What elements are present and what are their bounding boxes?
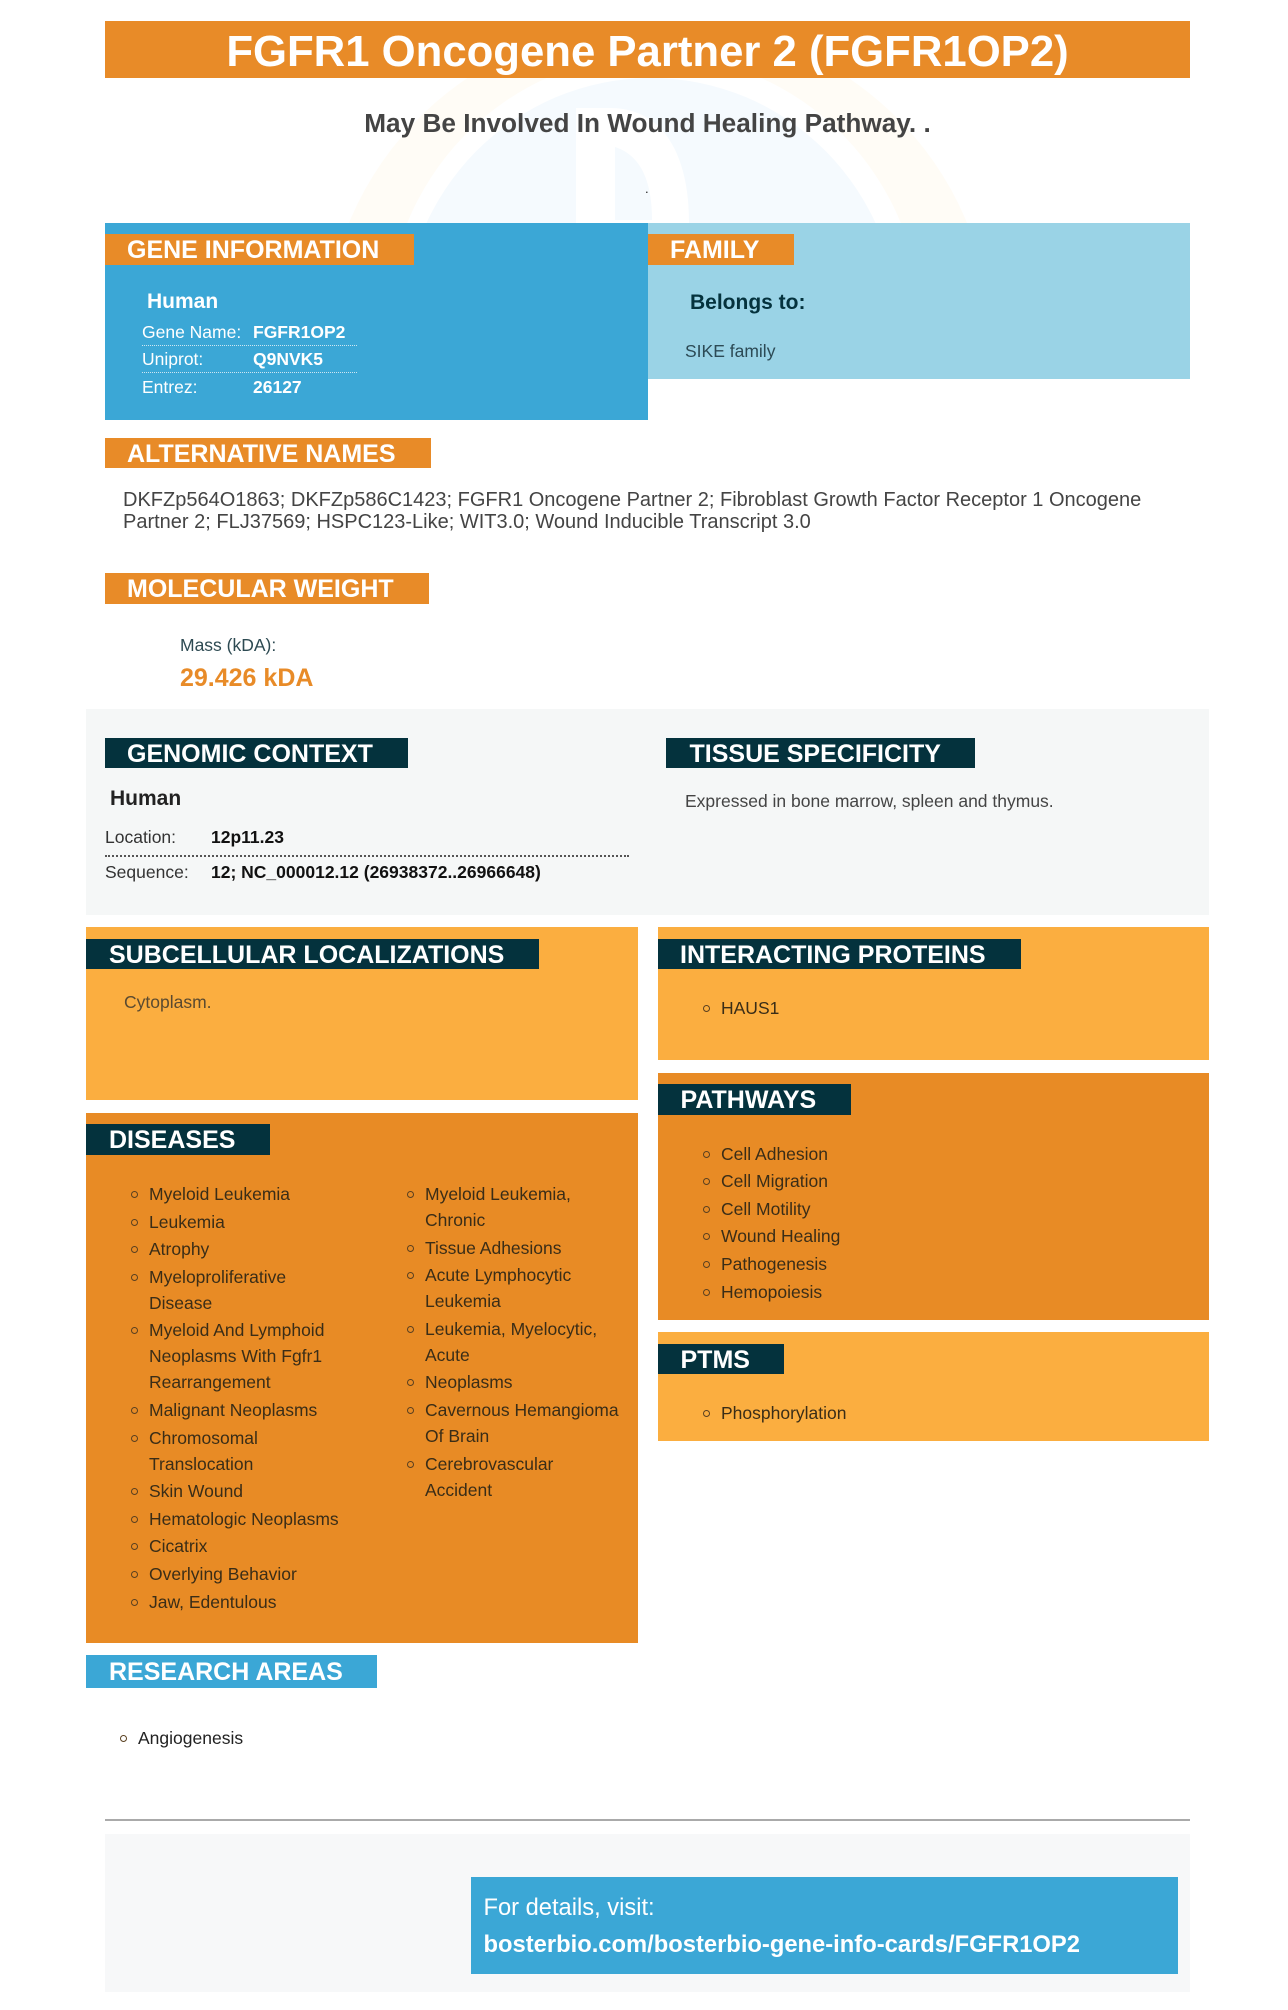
disease list column 2: Leukemia, Myelocytic, (425, 1319, 597, 1339)
entrez row: Entrez: (142, 377, 197, 397)
entrez row (142, 377, 302, 397)
alternative names text (123, 489, 1141, 533)
disease list column 2: Of Brain (425, 1426, 489, 1446)
disease list column 1: Chromosomal (149, 1428, 258, 1448)
subtitle: May Be Involved In Wound Healing Pathway. . (364, 108, 931, 138)
heading: diseases (86, 1124, 270, 1155)
alternative names text: DKFZp564O1863; DKFZp586C1423; FGFR1 Oncogene Partner 2; Fibroblast Growth Factor Receptor 1 Oncogene (123, 489, 1141, 511)
heading: pathways (658, 1084, 851, 1115)
heading: gene information: GENE INFORMATION (127, 236, 379, 264)
disease list column 2: Acute (425, 1345, 470, 1365)
heading: pathways: PATHWAYS (680, 1086, 816, 1114)
callout url: bosterbio.com/bosterbio-gene-info-cards/FGFR1OP2 (484, 1931, 1080, 1958)
uniprot row: Uniprot: (142, 349, 203, 369)
heading: family: FAMILY (670, 236, 759, 264)
heading: ptms (658, 1344, 784, 1374)
heading: subcellular localizations: SUBCELLULAR LOCALIZATIONS (109, 941, 504, 969)
ptms list: Phosphorylation (721, 1403, 846, 1423)
uniprot row (142, 347, 357, 373)
pathways list (703, 1144, 840, 1302)
callout label: For details, visit: (484, 1895, 655, 1921)
mass value: 29.426 kDA (180, 664, 313, 692)
pathways list: Wound Healing (721, 1226, 840, 1246)
disease list column 1: Hematologic Neoplasms (149, 1509, 339, 1529)
gene name row: Gene Name: (142, 322, 241, 342)
uniprot row: Q9NVK5 (253, 349, 323, 369)
belongs to label: Belongs to: (690, 291, 806, 314)
species label: Human (110, 787, 181, 810)
disease list column 1: Leukemia (149, 1212, 225, 1232)
research areas list: Angiogenesis (138, 1728, 243, 1748)
disease list column 1: Jaw, Edentulous (149, 1592, 276, 1612)
panel: pathways (658, 1073, 1209, 1320)
sequence row: Sequence: (105, 862, 189, 882)
disease list column 2: Cerebrovascular (425, 1454, 553, 1474)
disease list column 1: Neoplasms With Fgfr1 (149, 1346, 322, 1366)
disease list column 2: Neoplasms (425, 1372, 513, 1392)
species label: Human (147, 290, 218, 313)
tissue specificity text: Expressed in bone marrow, spleen and thymus. (685, 791, 1054, 811)
disease list column 2: Chronic (425, 1210, 485, 1230)
disease list column 1 (131, 1184, 339, 1612)
location row: 12p11.23 (211, 827, 284, 847)
interacting proteins list: HAUS1 (721, 998, 779, 1018)
heading: ptms: PTMS (680, 1346, 750, 1374)
sequence row: 12; NC_000012.12 (26938372..26966648) (211, 862, 541, 882)
family value: SIKE family (685, 341, 775, 361)
entrez row: 26127 (253, 377, 302, 397)
disease list column 2 (407, 1184, 619, 1500)
title: FGFR1 Oncogene Partner 2 (FGFR1OP2) (226, 27, 1069, 76)
gene name row: FGFR1OP2 (253, 322, 345, 342)
disease list column 1: Skin Wound (149, 1481, 243, 1501)
disease list column 1: Myeloid And Lymphoid (149, 1320, 324, 1340)
heading: genomic context: GENOMIC CONTEXT (127, 740, 373, 768)
panel: genomic context and tissue specificity (86, 709, 1209, 915)
disease list column 2: Tissue Adhesions (425, 1238, 562, 1258)
disease list column 1: Overlying Behavior (149, 1564, 297, 1584)
pathways list: Pathogenesis (721, 1254, 827, 1274)
disease list column 1: Myeloid Leukemia (149, 1184, 290, 1204)
panel: diseases (86, 1113, 638, 1643)
panel: family (648, 223, 1190, 379)
heading: research areas: RESEARCH AREAS (109, 1658, 343, 1686)
disease list column 1: Disease (149, 1293, 212, 1313)
heading: interacting proteins: INTERACTING PROTEINS (680, 941, 986, 969)
disease list column 2: Cavernous Hemangioma (425, 1400, 619, 1420)
pathways list: Cell Migration (721, 1171, 828, 1191)
mass label: Mass (kDA): (180, 635, 276, 655)
heading: alternative names: ALTERNATIVE NAMES (127, 440, 396, 468)
heading: research areas (86, 1655, 377, 1688)
callout: details link (471, 1877, 1178, 1974)
disease list column 1: Malignant Neoplasms (149, 1400, 317, 1420)
location row: Location: (105, 827, 176, 847)
heading: family (648, 234, 794, 265)
pathways list: Cell Adhesion (721, 1144, 828, 1164)
panel: interacting proteins (658, 927, 1209, 1060)
watermark logo (350, 78, 966, 223)
heading: tissue specificity: TISSUE SPECIFICITY (690, 740, 941, 768)
title (105, 21, 1190, 78)
disease list column 1: Rearrangement (149, 1372, 271, 1392)
disease list column 2: Accident (425, 1480, 492, 1500)
location row (105, 825, 629, 857)
disease list column 1: Atrophy (149, 1239, 209, 1259)
panel: ptms (658, 1332, 1209, 1441)
panel: subcellular localizations (86, 927, 638, 1100)
disease list column 1: Cicatrix (149, 1536, 207, 1556)
disease list column 2: Leukemia (425, 1291, 501, 1311)
stray dot: . (645, 181, 649, 196)
heading: molecular weight: MOLECULAR WEIGHT (127, 575, 394, 603)
pathways list: Hemopoiesis (721, 1282, 822, 1302)
heading: diseases: DISEASES (109, 1126, 235, 1154)
disease list column 2: Acute Lymphocytic (425, 1265, 571, 1285)
disease list column 2: Myeloid Leukemia, (425, 1184, 571, 1204)
disease list column 1: Myeloproliferative (149, 1267, 286, 1287)
pathways list: Cell Motility (721, 1199, 810, 1219)
panel: footer (105, 1834, 1190, 1992)
disease list column 1: Translocation (149, 1454, 253, 1474)
localization text: Cytoplasm. (124, 992, 212, 1012)
alternative names text: Partner 2; FLJ37569; HSPC123-Like; WIT3.0; Wound Inducible Transcript 3.0 (123, 511, 811, 533)
panel: gene information (105, 223, 648, 420)
gene name row (142, 320, 357, 346)
